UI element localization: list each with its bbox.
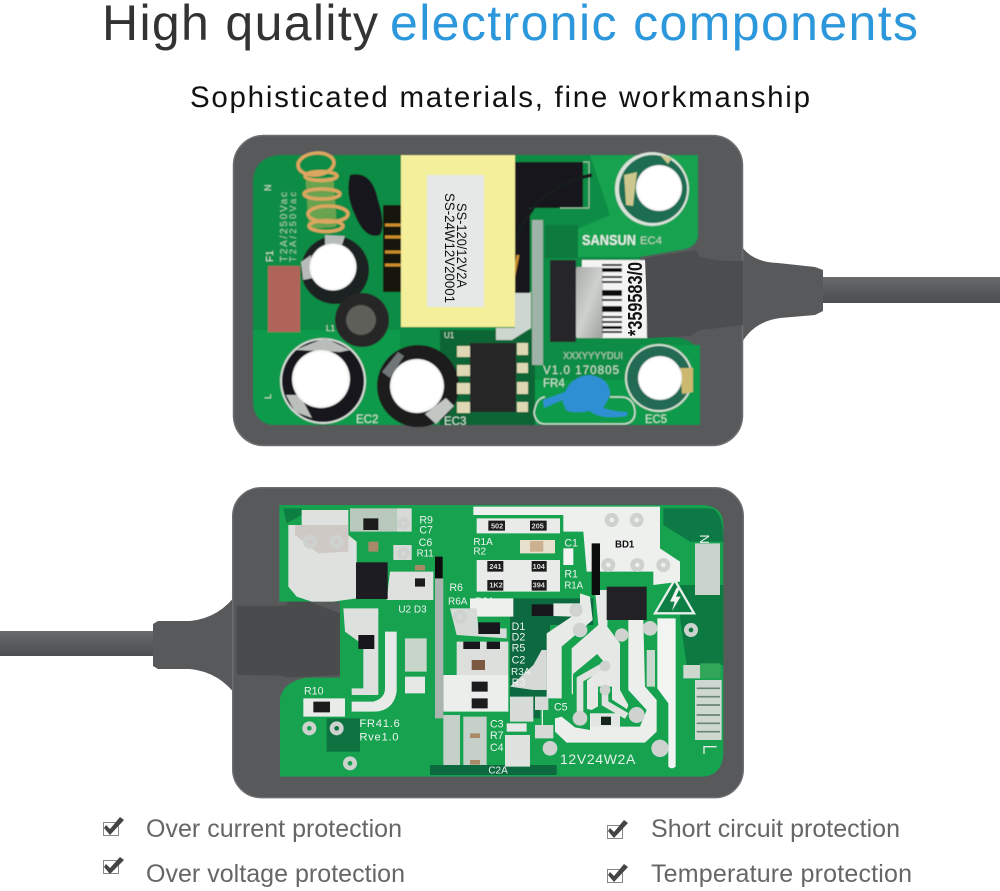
- power traces: 12V24W2A: [560, 751, 636, 767]
- silver traces: top block: [473, 507, 680, 585]
- board labels: R2A: [475, 596, 495, 607]
- panel: top board in grey case: [234, 136, 1000, 446]
- grey case: [233, 488, 743, 798]
- board labels: N: [263, 184, 273, 191]
- green PCB: [253, 155, 700, 425]
- item: temperature protection: Temperature protection: [651, 860, 912, 888]
- MOSFET chips: [356, 562, 388, 599]
- black connector: [515, 162, 583, 208]
- wire: [516, 175, 592, 240]
- board labels: R6: [449, 582, 463, 594]
- board labels: R10: [304, 685, 324, 697]
- board labels: Rve1.0: [359, 731, 399, 743]
- barcode: [602, 264, 622, 333]
- brown fuse: [268, 266, 300, 332]
- board labels: U1: [444, 331, 455, 340]
- board labels: C4: [490, 742, 504, 754]
- board labels: C7: [419, 524, 433, 536]
- board labels: R6A: [448, 596, 468, 607]
- board labels: EC5: [645, 414, 667, 426]
- board labels: R3A: [511, 667, 531, 678]
- title: [102, 0, 918, 51]
- board labels: C2: [512, 654, 525, 666]
- board labels: [304, 514, 712, 777]
- board labels: EC3: [444, 416, 466, 428]
- silver traces: mosfet area: [288, 510, 357, 602]
- panel: bottom board in grey case: 104: [533, 562, 546, 571]
- board labels: EC4: [640, 235, 662, 247]
- capacitor EC3: [377, 345, 459, 427]
- silver shield: [576, 267, 603, 338]
- board labels: R1A: [564, 580, 584, 591]
- pads: [305, 515, 696, 768]
- transformer: [401, 155, 515, 327]
- inductor: [335, 293, 389, 347]
- board labels: R4: [564, 519, 578, 531]
- board labels: L: [263, 394, 273, 399]
- blue component: [534, 375, 635, 424]
- board labels: R3: [512, 677, 525, 689]
- cable strap: [645, 250, 743, 338]
- grey case: [234, 136, 742, 446]
- transformer label: [427, 175, 484, 307]
- transformer label text: SS-120/12V2A: [454, 203, 469, 288]
- panel: bottom board in grey case: 394: [533, 581, 546, 590]
- board labels: C2A: [488, 766, 508, 777]
- capacitor EC2: [280, 338, 366, 424]
- board labels: F1: [265, 250, 276, 262]
- trace: left band: [547, 593, 593, 698]
- board labels: R7: [490, 730, 504, 742]
- board labels: D2: [512, 631, 525, 643]
- silver strip: [532, 220, 543, 365]
- board labels: T2A/250Vac: [279, 192, 290, 262]
- board labels: C5: [554, 701, 568, 713]
- cable right: [820, 277, 1000, 303]
- pads C5 parts: [591, 713, 620, 727]
- board labels: R11: [417, 549, 434, 560]
- board labels: L1: [326, 324, 335, 333]
- board labels: R1: [564, 569, 578, 581]
- capacitor EC4: [615, 152, 689, 226]
- board labels: FR41.6: [359, 718, 400, 730]
- green PCB: [279, 505, 723, 777]
- black capacitor part: [348, 174, 383, 236]
- panel: bottom board in grey case: 205: [532, 521, 544, 530]
- checklist left column: [104, 815, 405, 888]
- board labels: N: [697, 534, 712, 544]
- board labels: R2: [473, 546, 487, 557]
- icon: checkbox: [608, 820, 628, 838]
- board labels: [263, 184, 667, 428]
- transformer label text: [442, 193, 469, 303]
- board labels: T2A/250Vac: [288, 192, 298, 262]
- board labels: R9: [419, 514, 433, 526]
- black module: [550, 260, 576, 342]
- trace: center body: [572, 590, 628, 715]
- board labels: U2 D3: [398, 604, 427, 615]
- dark green areas: [510, 598, 593, 718]
- cable strap: [237, 602, 340, 678]
- board labels: C6: [419, 537, 432, 549]
- coil: [297, 151, 348, 232]
- IC chip pads: [457, 343, 528, 413]
- left capacitor: [301, 236, 369, 304]
- checklist right column: [608, 815, 912, 888]
- board labels: BD1: [615, 539, 635, 550]
- strain relief: [738, 240, 823, 350]
- icon: checkbox: [608, 864, 628, 882]
- board labels: R1A: [473, 537, 493, 548]
- SMD parts: [313, 518, 547, 712]
- panel: bottom board in grey case: [0, 488, 743, 798]
- barcode label: [582, 260, 647, 338]
- capacitor EC5: [625, 344, 693, 412]
- board labels: FR4: [543, 378, 565, 390]
- board labels: R5: [512, 643, 525, 655]
- strain relief: [153, 592, 238, 698]
- icon: checkbox: [104, 857, 124, 874]
- trace: bottom loop: [555, 620, 657, 743]
- icon: checkbox: [104, 817, 124, 836]
- board labels: D1: [512, 621, 525, 633]
- power traces: [507, 590, 722, 768]
- board labels: V1.0 170805: [543, 365, 619, 377]
- panel: bottom board in grey case: 241: [489, 562, 502, 571]
- board labels: C1: [564, 538, 578, 550]
- trace: right bar: [657, 618, 676, 768]
- board labels: SANSUN: [582, 232, 636, 249]
- board labels: C3: [490, 719, 504, 731]
- subtitle: Sophisticated materials, fine workmanship: [190, 81, 810, 114]
- item: over voltage protection: Over voltage protection: [146, 860, 405, 888]
- IC chip: [470, 343, 516, 412]
- board labels: XXXYYYYDUI: [563, 350, 623, 362]
- warning triangle: [655, 580, 694, 613]
- cable left: [0, 631, 160, 656]
- panel: bottom board in grey case: 502: [491, 521, 503, 530]
- item: over current protection: Over current protection: [146, 815, 402, 843]
- panel: bottom board in grey case: 1K2: [489, 581, 503, 590]
- transformer label text: SS-24W12V20001: [442, 193, 457, 303]
- barcode number: *359583/0: [625, 262, 647, 336]
- board labels: EC2: [356, 414, 378, 426]
- bright copper areas: [575, 155, 698, 257]
- item: short circuit protection: Short circuit protection: [651, 815, 900, 843]
